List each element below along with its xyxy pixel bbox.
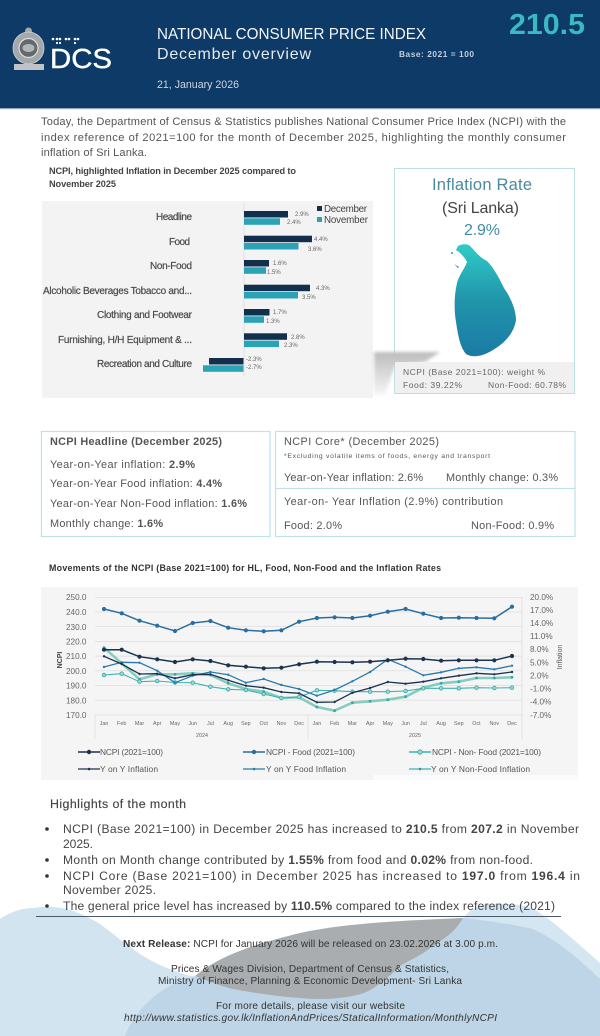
panel: NCPI core [276, 432, 575, 536]
left axis labels: 210.0 [66, 652, 87, 661]
category labels: Headline [156, 212, 192, 223]
left axis labels [66, 593, 87, 720]
right axis labels: 8.0% [530, 645, 549, 654]
footer wave background [0, 904, 600, 1036]
bar value labels: 3.6% [308, 247, 322, 253]
month labels: Aug [223, 721, 233, 727]
line chart legend [78, 747, 541, 774]
right axis labels: 2.0% [530, 672, 549, 680]
month labels: Feb [117, 721, 126, 727]
panel: NCPI headline: Year-on-Year inflation: 2.9% [50, 459, 195, 471]
bar chart panel [42, 201, 373, 398]
month labels: Sep [454, 721, 464, 727]
bar value labels: 3.5% [302, 295, 316, 301]
highlights list: 2025. [63, 837, 93, 851]
subtitle: December overview [157, 46, 311, 63]
bar value labels: 1.5% [267, 270, 281, 276]
intro paragraph: Today, the Department of Census & Statistics publishes National Consumer Price Index (NCPI) with the [41, 116, 566, 128]
intro paragraph: inflation of Sri Lanka. [41, 147, 147, 159]
month labels: Jun [188, 721, 197, 727]
right axis labels: 11.0% [530, 632, 553, 641]
division credit [158, 964, 462, 987]
right axis labels: 17.0% [530, 606, 553, 615]
month labels: Apr [153, 721, 162, 727]
panel: NCPI core: Food: 2.0% [284, 520, 342, 532]
month labels: Nov [277, 721, 286, 727]
header banner [0, 0, 600, 109]
category labels [43, 212, 193, 370]
inflation rate heading: Inflation Rate [432, 176, 532, 194]
month labels: Jul [207, 721, 214, 727]
series: NCPI food [104, 607, 512, 631]
bar value labels: -2.3% [246, 357, 262, 363]
country label: (Sri Lanka) [442, 200, 519, 217]
month labels: Jan [100, 721, 108, 727]
base note: Base: 2021 = 100 [399, 49, 474, 59]
month labels: Sep [241, 721, 251, 727]
panel: NCPI core: Year-on-Year inflation: 2.6% [284, 472, 423, 484]
panel: NCPI core: Year-on- Year Inflation (2.9%) contribution [284, 496, 503, 508]
highlights list: The general price level has increased by 110.5% compared to the index reference (2021) [63, 899, 555, 913]
bar chart heading [49, 166, 296, 189]
category labels: Alcoholic Beverages Tobacco and... [43, 286, 192, 297]
left axis labels: 250.0 [66, 593, 87, 602]
month labels: Nov [490, 721, 499, 727]
bar value labels [246, 212, 330, 371]
right axis labels [530, 593, 553, 720]
category labels: Clothing and Footwear [97, 310, 193, 321]
highlights list: NCPI (Base 2021=100) in December 2025 has increased to 210.5 from 207.2 in November [63, 822, 579, 836]
website note [124, 1001, 497, 1024]
weight footer: Food: 39.22% [403, 380, 462, 390]
bar chart heading: November 2025 [49, 179, 116, 189]
month labels: Jan [313, 721, 321, 727]
month labels: Dec [294, 721, 304, 727]
month labels: Jun [401, 721, 410, 727]
bar chart legend: December [324, 204, 368, 215]
month labels: Aug [436, 721, 446, 727]
icon: national emblem [13, 28, 44, 70]
title: NATIONAL CONSUMER PRICE INDEX [157, 26, 426, 43]
highlights list: NCPI Core (Base 2021=100) in December 2025 has increased to 197.0 from 196.4 in [63, 869, 580, 883]
website note: http://www.statistics.gov.lk/InflationAndPrices/StaticalInformation/MonthlyNCPI [124, 1013, 497, 1024]
series: Y on Y inflation [104, 656, 512, 702]
division credit: Ministry of Finance, Planning & Economic Development- Sri Lanka [158, 976, 462, 987]
category labels: Recreation and Culture [97, 359, 192, 370]
right axis labels: 5.0% [530, 658, 549, 668]
left axis labels: 240.0 [66, 608, 87, 617]
bar value labels: 1.3% [266, 319, 280, 325]
release date: 21, January 2026 [157, 79, 239, 91]
month labels: Feb [330, 721, 339, 727]
bar chart legend: November [324, 215, 369, 226]
month labels [100, 721, 517, 739]
bar value labels: 2.3% [284, 343, 298, 349]
category labels: Food [169, 237, 190, 248]
month labels: Oct [260, 721, 268, 727]
left axis labels: 170.0 [66, 711, 87, 720]
left axis labels: 190.0 [66, 682, 87, 690]
December bars [209, 211, 312, 364]
panel: NCPI core: *Excluding volatile items of foods, energy and transport [284, 453, 490, 460]
left axis title: NCPI [57, 652, 64, 668]
category labels: Furnishing, H/H Equipment & ... [58, 335, 192, 346]
division credit: Prices & Wages Division, Department of Census & Statistics, [171, 964, 449, 975]
logo: DCS: DCS [50, 43, 112, 74]
line chart legend: NCPI - Food (2021=100) [266, 747, 355, 757]
left axis labels: 220.0 [66, 638, 87, 646]
bar value labels: 2.4% [287, 220, 301, 226]
bar value labels: 2.9% [295, 212, 309, 218]
bar value labels: 1.7% [273, 310, 287, 316]
right axis labels: -4.0% [530, 698, 551, 706]
month labels: Oct [472, 721, 481, 727]
panel: NCPI headline: NCPI Headline (December 2025) [50, 436, 222, 448]
month labels: 2024 [196, 733, 208, 739]
month labels: Dec [507, 721, 517, 727]
panel: Sri Lanka inflation rate [374, 168, 574, 395]
month labels: 2025 [409, 733, 421, 739]
panel: line chart [41, 587, 578, 780]
panel: NCPI headline: Year-on-Year Food inflation: 4.4% [50, 478, 222, 490]
left axis labels: 200.0 [66, 667, 87, 676]
highlights list: November 2025. [63, 883, 156, 897]
November bars [203, 218, 298, 372]
month labels: May [170, 721, 180, 727]
right axis labels: 14.0% [530, 619, 553, 628]
panel: NCPI headline: Year-on-Year Non-Food inflation: 1.6% [50, 498, 247, 510]
bar value labels: 4.3% [316, 286, 330, 292]
series: Y on Y Non-Food inflation [104, 648, 512, 711]
month labels: Jul [420, 721, 427, 727]
line chart legend: NCPI (2021=100) [100, 747, 163, 757]
right axis labels: -7.0% [530, 711, 551, 720]
weight footer: Non-Food: 60.78% [488, 380, 566, 390]
month labels: Apr [366, 721, 374, 727]
month labels: Mar [348, 721, 357, 727]
bar value labels: 4.4% [314, 237, 328, 243]
highlights list [45, 822, 580, 913]
month labels: May [383, 721, 393, 727]
right axis labels: 20.0% [530, 593, 553, 602]
website note: For more details, please visit our website [216, 1001, 405, 1012]
panel: NCPI headline [42, 432, 270, 536]
intro paragraph: index reference of 2021=100 for the month of December 2025, highlighting the monthly consumer [41, 132, 566, 144]
line chart legend: Y on Y Inflation [100, 764, 158, 774]
left axis labels: 180.0 [66, 696, 87, 706]
panel: NCPI core: Non-Food: 0.9% [471, 520, 554, 532]
highlights heading: Highlights of the month [50, 797, 186, 811]
month labels: Mar [135, 721, 144, 727]
left axis labels: 230.0 [66, 623, 87, 632]
bar chart heading: NCPI, highlighted Inflation in December 2025 compared to [49, 166, 296, 176]
line chart legend: Y on Y Non-Food Inflation [431, 764, 530, 774]
category labels: Non-Food [150, 261, 192, 272]
inflation rate value: 2.9% [464, 222, 500, 239]
bar value labels: 1.6% [273, 261, 287, 267]
right axis title: Inflation [557, 645, 564, 669]
next release note: Next Release: NCPI for January 2026 will be released on 23.02.2026 at 3.00 p.m. [123, 939, 498, 950]
panel: NCPI headline: Monthly change: 1.6% [50, 518, 163, 530]
panel: NCPI core: NCPI Core* (December 2025) [284, 436, 439, 448]
weight footer [395, 362, 574, 393]
series: NCPI [104, 650, 512, 668]
panel: NCPI core: Monthly change: 0.3% [446, 472, 558, 484]
highlights list: Month on Month change contributed by 1.55% from food and 0.02% from non-food. [63, 853, 533, 867]
line chart legend: NCPI - Non- Food (2021=100) [432, 747, 541, 757]
headline index value: 210.5 [509, 9, 585, 41]
line chart legend: Y on Y Food Inflation [266, 764, 346, 774]
footer rule [36, 916, 561, 918]
bar chart legend [317, 204, 369, 226]
line chart heading: Movements of the NCPI (Base 2021=100) for HL, Food, Non-Food and the Inflation Rates [49, 563, 441, 573]
bar value labels: -2.7% [246, 365, 262, 371]
right axis labels: -1.0% [530, 684, 551, 694]
bar value labels: 2.8% [291, 335, 305, 341]
intro paragraph [41, 116, 566, 159]
map: Sri Lanka [451, 244, 516, 356]
weight footer: NCPI (Base 2021=100): weight % [403, 367, 545, 377]
series: NCPI non-food [104, 674, 512, 698]
series: Y on Y food inflation [104, 659, 512, 696]
